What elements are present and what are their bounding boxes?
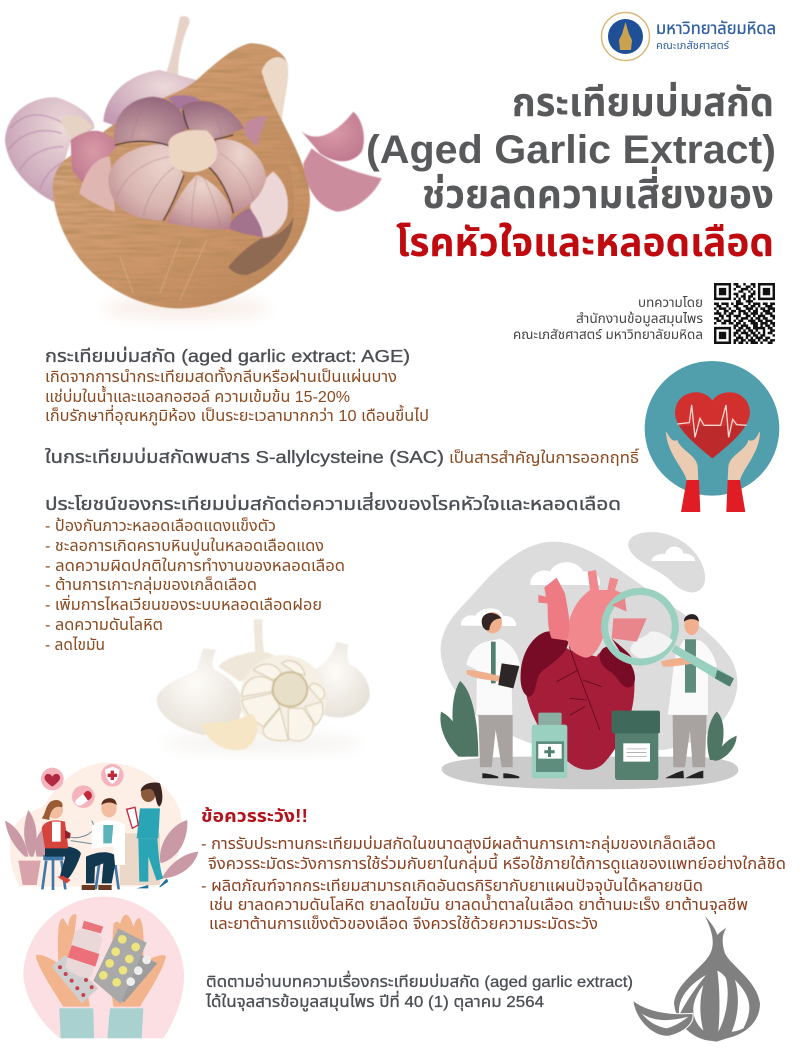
credit text: สำนักงานข้อมูลสมุนไพร	[576, 311, 703, 326]
right cloves	[302, 112, 364, 161]
doctor	[82, 798, 125, 890]
heart	[675, 392, 750, 458]
text block: benefits list: - ลดไขมัน	[45, 637, 105, 654]
bottle right	[612, 711, 660, 780]
icon: grey garlic	[633, 916, 760, 1042]
plants	[440, 681, 737, 761]
warning text	[201, 806, 786, 933]
text block: benefits list: - ลดความผิดปกติในการทำงานของหลอดเลือด	[45, 558, 345, 575]
logo: Mahidol University: คณะเภสัชศาสตร์	[656, 40, 730, 52]
icon: heart held in hands	[645, 361, 779, 512]
text block: what is AGE: เก็บรักษาที่อุณหภูมิห้อง เป็นระยะเวลามากกว่า 10 เดือนขึ้นไป	[45, 404, 429, 425]
back bulb	[218, 619, 282, 682]
hands	[36, 914, 166, 1007]
warning text: - การรับประทานกระเทียมบ่มสกัดในขนาดสูงมีผลต้านการเกาะกลุ่มของเกล็ดเลือด	[201, 835, 716, 853]
bowl front	[53, 156, 310, 308]
warning text: - ผลิตภัณฑ์จากกระเทียมสามารถเกิดอันตรกิริยากับยาแผนปัจจุบันได้หลายชนิด	[201, 878, 703, 895]
title: โรคหัวใจและหลอดเลือด	[396, 221, 774, 265]
text block: benefits list: - ป้องกันภาวะหลอดเลือดแดงแข็งตัว	[45, 517, 276, 535]
cuffs	[59, 1008, 143, 1038]
magnifying glass	[605, 591, 734, 687]
text block: what is AGE	[45, 346, 429, 425]
patient	[42, 800, 81, 883]
text block: benefits list: ประโยชน์ของกระเทียมบ่มสกัดต่อความเสี่ยงของโรคหัวใจและหลอดเลือด	[45, 492, 621, 514]
ground	[442, 757, 738, 789]
text block: what is AGE: แช่บ่มในน้ำและแอลกอฮอล์ ความเข้มข้น 15-20%	[45, 385, 350, 406]
title: ช่วยลดความเสี่ยงของ	[422, 166, 774, 217]
text block: benefits list: - ชะลอการเกิดคราบหินปูนในหลอดเลือดแดง	[45, 538, 324, 555]
left bulb	[157, 648, 242, 735]
right bulb	[307, 642, 370, 717]
warning text: ข้อควรระวัง!!	[201, 806, 308, 826]
title	[366, 80, 776, 265]
doctor right	[661, 614, 717, 778]
logo seal	[602, 12, 650, 60]
text block: SAC	[45, 447, 639, 467]
stools and shelf	[120, 833, 160, 885]
blister pack pink	[52, 955, 98, 1003]
centre bulb	[240, 655, 327, 742]
illustration: hands holding medicine	[23, 897, 184, 1038]
single clove	[202, 713, 258, 750]
credit text: คณะเภสัชศาสตร์ มหาวิทยาลัยมหิดล	[513, 327, 703, 342]
bottle	[65, 921, 103, 978]
follow-up note	[205, 970, 633, 1011]
stool frames	[41, 855, 120, 890]
text block: benefits list: - ลดความดันโลหิต	[45, 617, 163, 634]
warning text: และยาต้านการแข็งตัวของเลือด จึงควรใช้ด้วยความระมัดระวัง	[209, 915, 598, 933]
photo: white garlic bulbs	[157, 619, 370, 752]
bowl back and handle	[53, 43, 310, 308]
text block: benefits list: - เพิ่มการไหลเวียนของระบบหลอดเลือดฝอย	[45, 594, 322, 614]
text block: what is AGE: กระเทียมบ่มสกัด (aged garlic extract: AGE)	[45, 346, 410, 366]
follow-up note: ได้ในจุลสารข้อมูลสมุนไพร ปีที่ 40 (1) ตุลาคม 2564	[205, 990, 544, 1011]
follow-up note: ติดตามอ่านบทความเรื่องกระเทียมบ่มสกัด (aged garlic extract)	[206, 970, 633, 991]
bottle left	[532, 713, 567, 778]
illustration: doctors examining a heart	[440, 532, 738, 789]
sleeves	[681, 480, 700, 512]
logo: Mahidol University: มหาวิทยาลัยมหิดล	[656, 19, 776, 38]
logo: Mahidol University	[602, 12, 776, 60]
hands	[666, 432, 698, 481]
grey backdrop	[441, 542, 737, 750]
stethoscope tube	[71, 821, 100, 845]
warning text: เช่น ยาลดความดันโลหิต ยาลดไขมัน ยาลดน้ำตาลในเลือด ยาต้านมะเร็ง ยาต้านจุลชีพ	[209, 893, 748, 914]
health icons	[41, 764, 124, 808]
stem of back bulb	[160, 16, 197, 90]
warning text: จึงควรระมัดระวังการการใช้ร่วมกับยาในกลุ่มนี้ หรือใช้ภายใต้การดูแลของแพทย์อย่างใกล้ชิด	[208, 852, 786, 873]
text block: SAC: ในกระเทียมบ่มสกัดพบสาร S-allylcysteine (SAC)	[45, 447, 444, 467]
title: กระเทียมบ่มสกัด	[512, 80, 774, 125]
clouds	[461, 547, 695, 626]
text block: benefits list: - ต้านการเกาะกลุ่มของเกล็ดเลือด	[45, 576, 257, 594]
QR code	[714, 283, 775, 344]
credit text: บทความโดย	[638, 295, 703, 310]
illustration: blood pressure check	[5, 763, 198, 890]
credit text	[513, 295, 703, 342]
nurse	[127, 783, 168, 888]
doctor left	[466, 612, 521, 778]
plants	[5, 810, 198, 885]
text block: benefits list	[45, 492, 621, 654]
title: (Aged Garlic Extract)	[366, 128, 776, 172]
garlic segments	[71, 131, 117, 183]
heart	[521, 570, 635, 770]
left bulb	[5, 97, 94, 202]
text block: SAC: เป็นสารสำคัญในการออกฤทธิ์	[449, 448, 639, 467]
text block: what is AGE: เกิดจากการนำกระเทียมสดทั้งกลีบหรือฝานเป็นแผ่นบาง	[45, 366, 397, 386]
blister packs yellow	[93, 928, 157, 1004]
photo: garlic in wooden bowl	[5, 16, 382, 318]
